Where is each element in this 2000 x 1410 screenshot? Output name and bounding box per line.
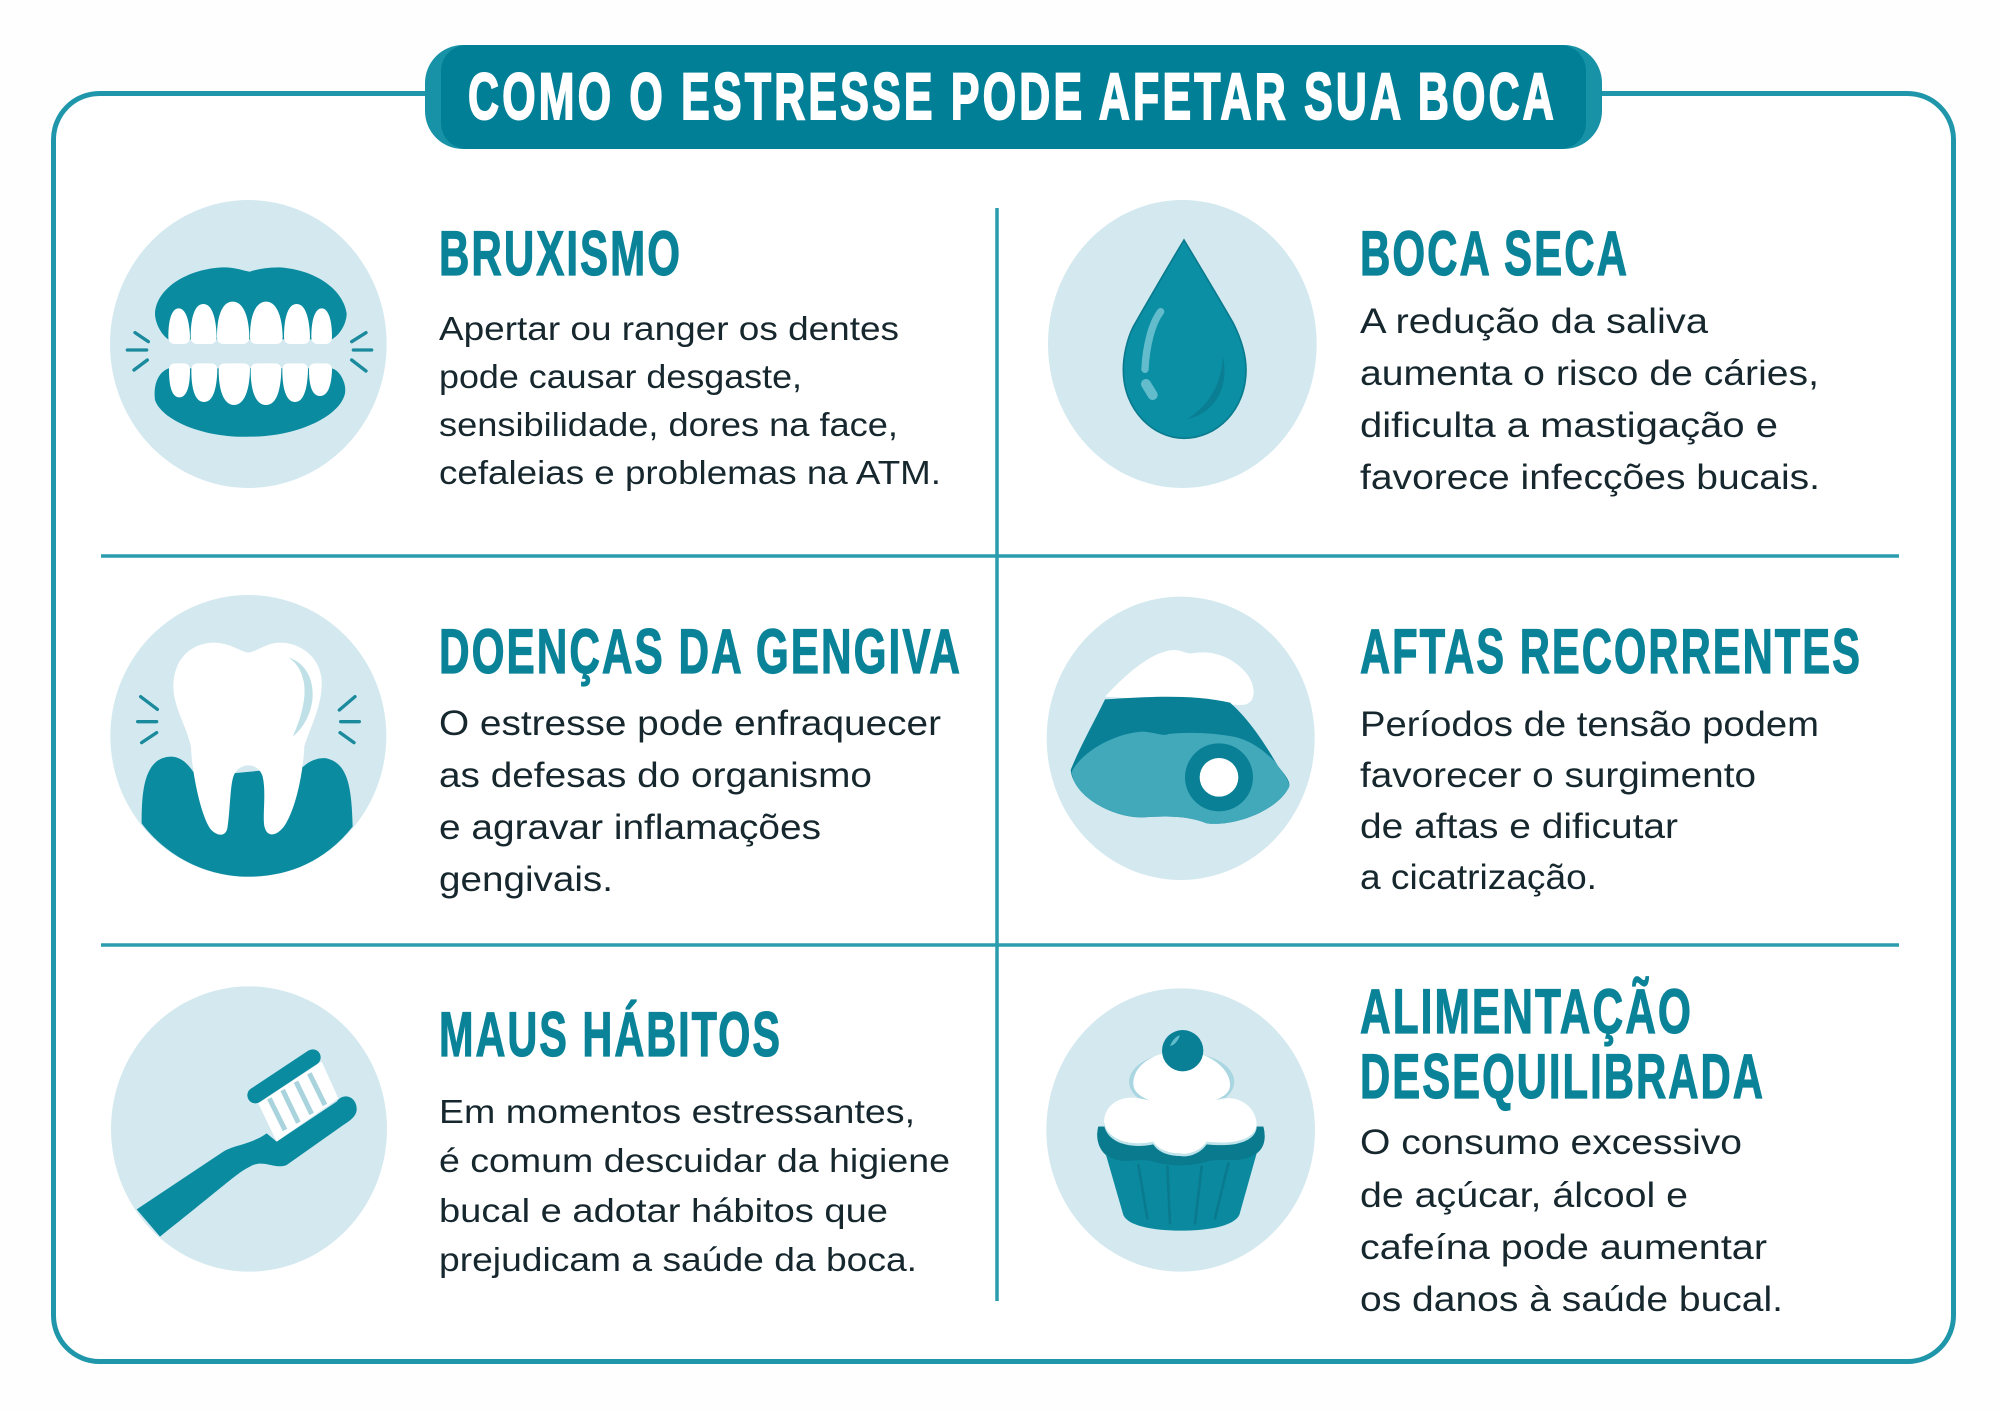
dividers xyxy=(101,208,1899,1301)
icon: mouth with ulcer xyxy=(1047,597,1315,880)
text block xyxy=(439,1093,950,1278)
text block xyxy=(1360,1123,1783,1319)
text block: de açúcar, álcool e xyxy=(1360,1176,1688,1215)
text block: Em momentos estressantes, xyxy=(439,1093,915,1130)
heading xyxy=(1360,976,1765,1112)
panel: aftas recorrentes xyxy=(1047,597,1862,897)
text block: Períodos de tensão podem xyxy=(1360,705,1819,744)
text block: sensibilidade, dores na face, xyxy=(439,406,898,443)
heading: DOENÇAS DA GENGIVA xyxy=(439,617,962,687)
panel: alimentação desequilibrada xyxy=(1046,976,1783,1319)
text block: O estresse pode enfraquecer xyxy=(439,704,941,743)
icon: tooth and gums xyxy=(110,595,386,877)
icon: toothbrush xyxy=(111,986,387,1272)
text block: Apertar ou ranger os dentes xyxy=(439,310,899,347)
title banner xyxy=(425,45,1602,149)
text block: O consumo excessivo xyxy=(1360,1123,1742,1162)
text block: prejudicam a saúde da boca. xyxy=(439,1241,917,1278)
text block: dificulta a mastigação e xyxy=(1360,406,1778,445)
panel: maus hábitos xyxy=(111,986,950,1278)
text block xyxy=(1360,302,1820,497)
icon: water drop xyxy=(1048,200,1317,488)
text block xyxy=(439,310,941,491)
text block xyxy=(1360,705,1819,897)
text block: A redução da saliva xyxy=(1360,302,1709,341)
text block: cafeína pode aumentar xyxy=(1360,1228,1767,1267)
text block: as defesas do organismo xyxy=(439,756,872,795)
panel: doenças da gengiva xyxy=(110,595,962,899)
heading: BRUXISMO xyxy=(439,219,682,289)
text block: bucal e adotar hábitos que xyxy=(439,1192,888,1229)
text block: pode causar desgaste, xyxy=(439,358,802,395)
text block: a cicatrização. xyxy=(1360,858,1597,897)
panel: boca seca xyxy=(1048,200,1820,497)
text block: e agravar inflamações xyxy=(439,808,821,847)
icon: clenched teeth xyxy=(110,200,387,488)
text block: favorece infecções bucais. xyxy=(1360,458,1820,497)
heading: MAUS HÁBITOS xyxy=(439,1000,782,1070)
heading: BOCA SECA xyxy=(1360,219,1629,289)
text block: cefaleias e problemas na ATM. xyxy=(439,454,941,491)
panel: bruxismo xyxy=(110,200,941,491)
text block: os danos à saúde bucal. xyxy=(1360,1280,1783,1319)
text block: gengivais. xyxy=(439,860,613,899)
text block: é comum descuidar da higiene xyxy=(439,1142,950,1179)
heading: DESEQUILIBRADA xyxy=(1360,1042,1765,1112)
icon: cupcake xyxy=(1046,988,1315,1272)
text block xyxy=(439,704,941,899)
text block: de aftas e dificutar xyxy=(1360,807,1678,846)
text block: favorecer o surgimento xyxy=(1360,756,1756,795)
text block: aumenta o risco de cáries, xyxy=(1360,354,1819,393)
heading: ALIMENTAÇÃO xyxy=(1360,976,1693,1047)
